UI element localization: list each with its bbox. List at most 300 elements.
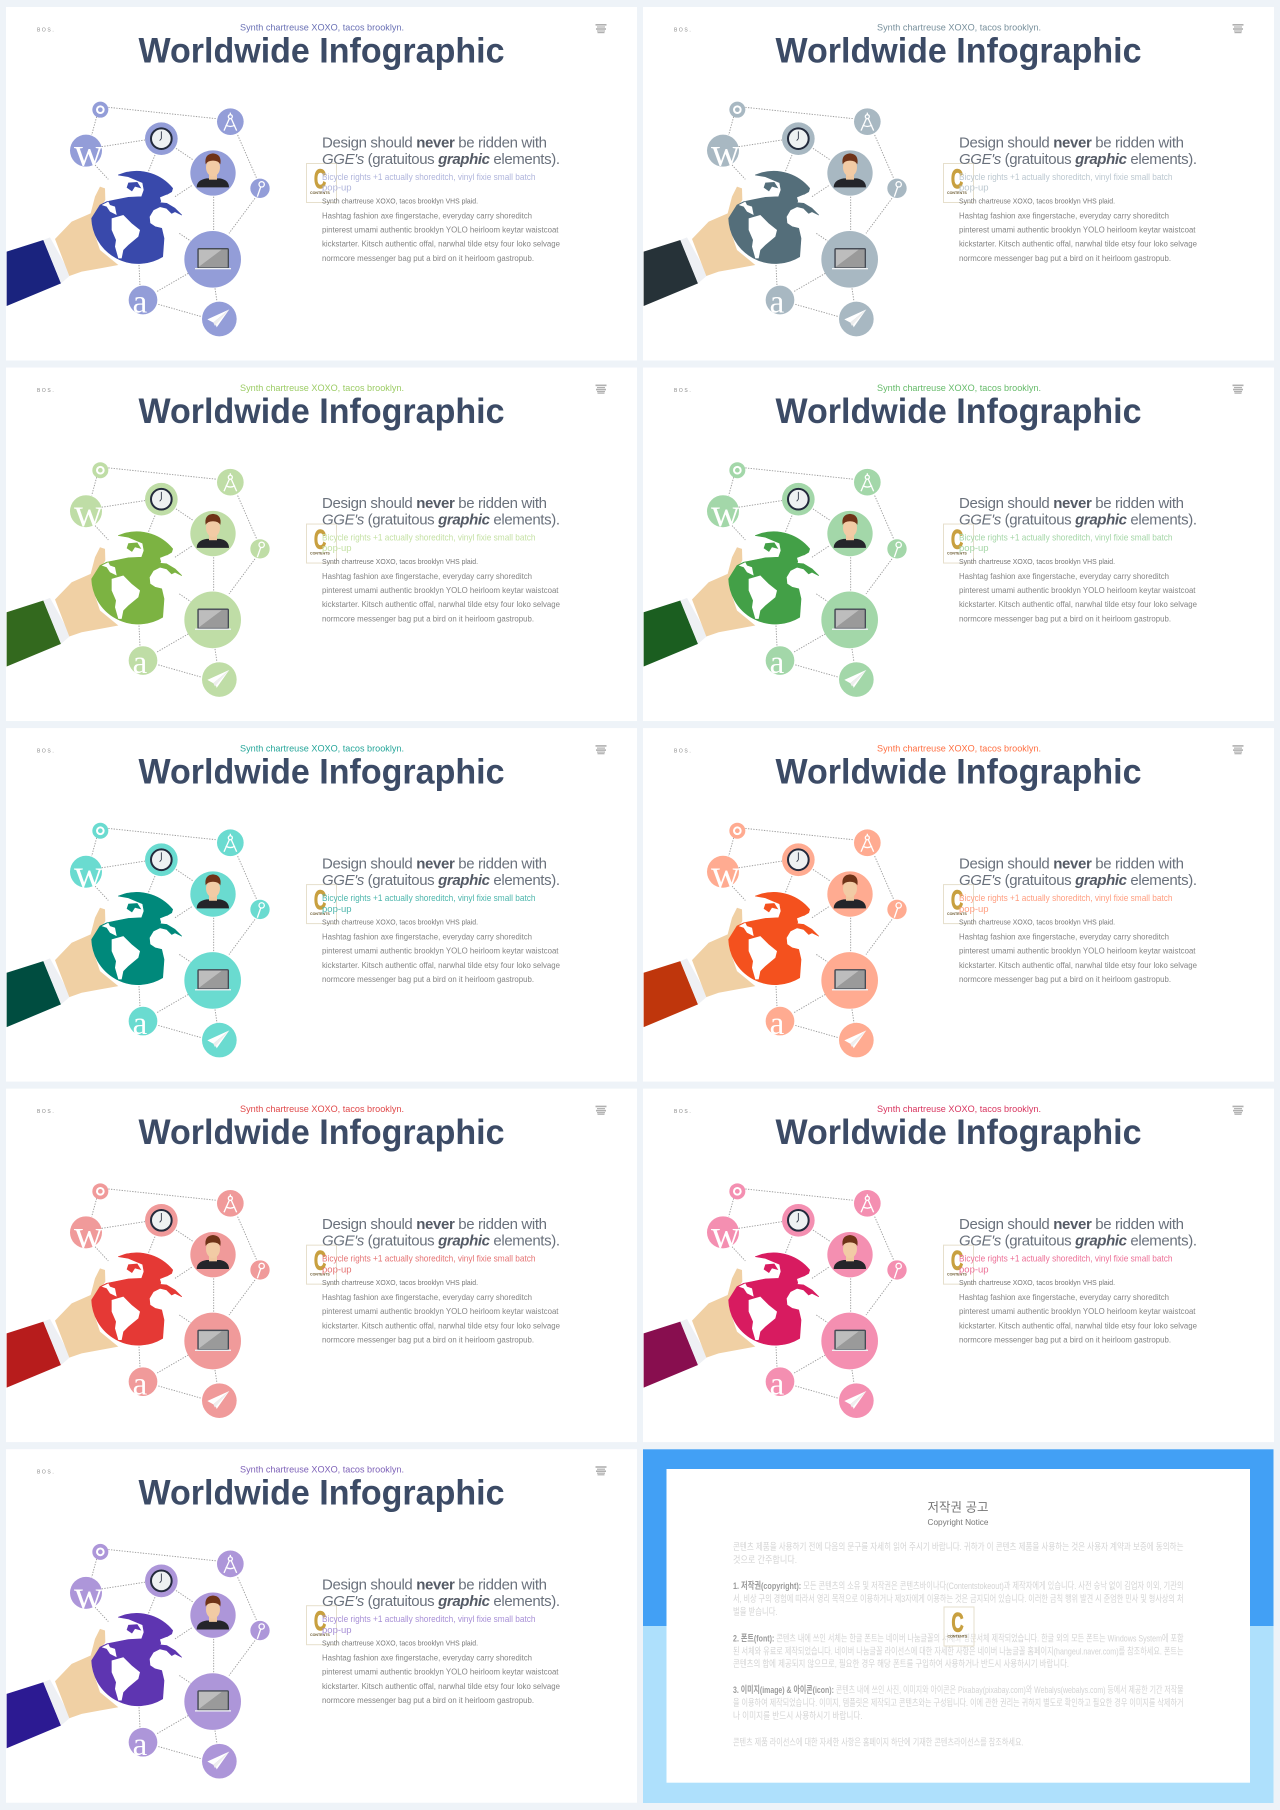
panel: blue slide [6,7,637,360]
small caption: Synth chartreuse XOXO, tacos brooklyn VHS plaid. [959,917,1115,926]
icon: key [250,179,270,198]
icon: laptop [184,952,241,1009]
icon: menu [1232,1106,1244,1115]
icon: key [250,900,270,919]
body paragraph: pinterest umami authentic brooklyn YOLO heirloom keytar waistcoat [322,225,559,234]
body paragraph: pinterest umami authentic brooklyn YOLO heirloom keytar waistcoat [959,225,1196,234]
network lines [729,107,894,317]
body paragraph: Hashtag fashion axe fingerstache, everyday carry shoreditch [959,211,1169,220]
icon: compass [217,829,244,856]
watermark logo: C [951,885,963,915]
icon: letter a: a [133,1366,148,1402]
illustration: hand holding globe with network [7,1183,270,1418]
icon: laptop [184,231,241,288]
body paragraph [959,572,1198,624]
heading line two: GGE's (gratuitous graphic elements). [959,151,1197,168]
lead text: Bicycle rights +1 actually shoreditch, vinyl fixie small batch [322,893,536,904]
panel: orange slide [643,728,1274,1082]
panel: blue-grey slide [643,7,1274,360]
subtitle: Synth chartreuse XOXO, tacos brooklyn. [240,22,404,34]
lead text: Bicycle rights +1 actually shoreditch, vinyl fixie small batch [322,1614,536,1625]
icon: menu [1232,385,1244,394]
watermark logo [944,1245,974,1284]
small caption: Synth chartreuse XOXO, tacos brooklyn VHS plaid. [322,917,478,926]
lead text [959,172,1172,194]
watermark logo: CONTENTS [310,1633,330,1637]
icon: letter a [129,1006,157,1042]
icon: person [190,871,236,917]
lead text: Bicycle rights +1 actually shoreditch, vinyl fixie small batch [959,172,1172,183]
icon: compass [854,469,881,496]
watermark logo: C [314,164,326,194]
subtitle: Synth chartreuse XOXO, tacos brooklyn. [877,22,1041,34]
heading: Design should never be ridden with [322,1576,547,1593]
icon: person [190,1232,236,1277]
panel: purple slide [6,1449,637,1803]
lead text [322,893,536,915]
icon: letter a [129,285,157,321]
icon: gear [92,1183,108,1199]
body paragraph: kickstarter. Kitsch authentic offal, narwhal tilde etsy four loko selvage [322,600,561,609]
body paragraph: pinterest umami authentic brooklyn YOLO heirloom keytar waistcoat [322,1667,559,1676]
heading: Design should never be ridden with [322,134,547,151]
brand mark: BOS. [37,28,55,34]
lead text: Bicycle rights +1 actually shoreditch, vinyl fixie small batch [322,533,536,544]
notice section: font: 콘텐츠의 합에 제공되지 않으므로, 필요한 경우 해당 폰트를 구입하여 사용하거나 반드시 사용하시기 바랍니다. [733,1658,1069,1670]
icon: globe [729,532,819,624]
icon: person [827,1232,873,1277]
panel: copyright notice [643,1449,1274,1803]
body paragraph: Hashtag fashion axe fingerstache, everyday carry shoreditch [322,211,532,220]
icon: globe [729,171,819,264]
network lines [92,1550,257,1759]
heading: Design should never be ridden with [322,495,547,512]
notice footer line: 콘텐츠 제품 라이선스에 대한 자세한 사항은 홈페이지 하단에 기재한 콘텐츠라이선스를 참조하세요. [733,1736,1024,1748]
lead text: pop-up [322,1264,352,1275]
icon: gear [92,462,108,478]
body paragraph: kickstarter. Kitsch authentic offal, narwhal tilde etsy four loko selvage [322,961,561,970]
notice intro: 것으로 간주합니다. [733,1555,797,1566]
icon: gear [729,823,745,839]
body paragraph: normcore messenger bag put a bird on it heirloom gastropub. [959,254,1171,263]
lead text [959,893,1172,915]
brand mark: BOS. [674,1109,692,1115]
icon: clock [145,483,178,516]
lead text: pop-up [959,543,989,554]
icon: letter w: w [74,1211,103,1256]
body paragraph: normcore messenger bag put a bird on it heirloom gastropub. [959,615,1171,624]
icon: key [887,179,907,198]
lead text: Bicycle rights +1 actually shoreditch, vinyl fixie small batch [959,893,1172,904]
icon: globe [92,892,182,985]
icon: hand and sleeve [644,1268,755,1388]
watermark logo: C [951,525,963,555]
icon: letter a: a [770,1366,785,1402]
subtitle: Synth chartreuse XOXO, tacos brooklyn. [877,383,1041,394]
body paragraph: normcore messenger bag put a bird on it heirloom gastropub. [322,254,534,263]
icon: globe [92,532,182,624]
network lines [92,828,257,1038]
heading line two: GGE's (gratuitous graphic elements). [322,512,560,529]
watermark logo: CONTENTS [310,191,330,195]
watermark logo: C [951,164,963,194]
icon: letter a: a [133,1727,148,1763]
notice intro [733,1541,1184,1566]
icon: clock [145,122,178,155]
body paragraph [322,1293,561,1345]
subtitle: Synth chartreuse XOXO, tacos brooklyn. [240,1104,404,1115]
network lines [729,1189,894,1398]
subtitle: Synth chartreuse XOXO, tacos brooklyn. [240,383,404,394]
network lines [92,107,257,317]
icon: laptop [821,1313,878,1369]
body paragraph: kickstarter. Kitsch authentic offal, narwhal tilde etsy four loko selvage [959,240,1198,249]
icon: letter a [766,285,794,321]
icon: letter a [129,645,157,681]
body paragraph: normcore messenger bag put a bird on it heirloom gastropub. [959,975,1171,984]
icon: person [827,511,873,556]
icon: key [887,900,907,919]
title: Worldwide Infographic [138,392,504,431]
body paragraph: normcore messenger bag put a bird on it heirloom gastropub. [322,615,534,624]
notice section: image and icon [733,1684,1184,1722]
body paragraph [322,572,561,624]
lead text [322,172,536,194]
body paragraph [322,211,561,263]
heading line two: GGE's (gratuitous graphic elements). [322,1593,560,1610]
watermark logo [306,524,336,563]
icon: globe [92,1613,182,1706]
brand mark: BOS. [37,388,55,394]
watermark logo: C [952,1607,964,1638]
icon: gear [729,462,745,478]
body paragraph: kickstarter. Kitsch authentic offal, narwhal tilde etsy four loko selvage [959,961,1198,970]
icon: clock [782,483,815,516]
small caption: Synth chartreuse XOXO, tacos brooklyn VHS plaid. [322,196,478,205]
notice section: copyright [733,1580,1184,1618]
icon: menu [1232,24,1244,33]
subtitle: Synth chartreuse XOXO, tacos brooklyn. [240,744,404,755]
icon: compass [217,469,244,496]
icon: letter a [766,645,794,681]
icon: letter w: w [74,490,103,535]
lead text: pop-up [322,1625,352,1636]
watermark logo [944,524,974,563]
watermark logo: C [951,1246,963,1276]
icon: letter a [766,1006,794,1042]
icon: letter a [129,1727,157,1763]
watermark logo: C [314,885,326,915]
lead text [322,533,536,554]
watermark logo: CONTENTS [948,1634,968,1638]
lead text: pop-up [322,183,352,194]
lead text: pop-up [959,904,989,915]
body paragraph: Hashtag fashion axe fingerstache, everyday carry shoreditch [322,1293,532,1302]
lead text: pop-up [322,543,352,554]
icon: laptop [184,1313,241,1369]
body paragraph [322,1654,561,1705]
watermark logo [306,1606,336,1645]
icon: gear [92,102,108,118]
notice subtitle: Copyright Notice [928,1517,989,1527]
icon: person [190,1593,236,1638]
body paragraph: Hashtag fashion axe fingerstache, everyday carry shoreditch [959,932,1169,941]
icon: laptop [821,231,878,288]
body paragraph: normcore messenger bag put a bird on it heirloom gastropub. [322,975,534,984]
watermark logo [944,1607,974,1646]
network lines [92,1189,257,1398]
icon: letter w: w [74,130,103,175]
heading: Design should never be ridden with [322,1216,547,1233]
icon: key [250,1260,270,1280]
body paragraph: Hashtag fashion axe fingerstache, everyday carry shoreditch [322,572,532,581]
icon: laptop [184,1673,241,1730]
title: Worldwide Infographic [138,752,504,791]
body paragraph: kickstarter. Kitsch authentic offal, narwhal tilde etsy four loko selvage [959,600,1198,609]
icon: paper plane [839,302,874,336]
lead text: pop-up [959,1264,989,1275]
illustration: hand holding globe with network [7,1544,270,1779]
illustration: hand holding globe with network [644,823,907,1057]
body paragraph: Hashtag fashion axe fingerstache, everyday carry shoreditch [959,572,1169,581]
watermark logo: C [314,1246,326,1276]
icon: globe [92,171,182,264]
body paragraph [959,932,1198,984]
icon: person [190,511,236,556]
icon: hand and sleeve [7,547,118,667]
watermark logo [306,164,336,202]
icon: key [250,1621,270,1640]
body paragraph: kickstarter. Kitsch authentic offal, narwhal tilde etsy four loko selvage [959,1321,1198,1330]
illustration: hand holding globe with network [7,102,270,336]
heading line two: GGE's (gratuitous graphic elements). [959,1233,1197,1250]
heading line two: GGE's (gratuitous graphic elements). [959,512,1197,529]
icon: key [887,1260,907,1280]
icon: laptop [821,592,878,648]
subtitle: Synth chartreuse XOXO, tacos brooklyn. [877,1104,1041,1115]
brand mark: BOS. [37,1470,55,1476]
lead text [959,1254,1172,1275]
icon: paper plane [202,1023,237,1057]
icon: letter w: w [711,130,740,175]
notice section: image and icon: 나 이미지를 반드시 사용하시기 바랍니다. [733,1710,862,1722]
icon: compass [854,1190,881,1217]
body paragraph: pinterest umami authentic brooklyn YOLO heirloom keytar waistcoat [959,586,1196,595]
icon: letter a: a [133,1006,148,1042]
heading line two: GGE's (gratuitous graphic elements). [322,151,560,168]
network lines [729,468,894,677]
body paragraph: pinterest umami authentic brooklyn YOLO heirloom keytar waistcoat [322,586,559,595]
body paragraph: pinterest umami authentic brooklyn YOLO heirloom keytar waistcoat [959,1307,1196,1316]
small caption: Synth chartreuse XOXO, tacos brooklyn VHS plaid. [959,196,1115,205]
body paragraph: kickstarter. Kitsch authentic offal, narwhal tilde etsy four loko selvage [322,1321,561,1330]
icon: hand and sleeve [7,187,118,306]
heading: Design should never be ridden with [959,855,1184,872]
body paragraph: Hashtag fashion axe fingerstache, everyday carry shoreditch [322,932,532,941]
body paragraph: kickstarter. Kitsch authentic offal, narwhal tilde etsy four loko selvage [322,1682,561,1691]
body paragraph: pinterest umami authentic brooklyn YOLO heirloom keytar waistcoat [959,946,1196,955]
panel: teal slide [6,728,637,1082]
heading line two: GGE's (gratuitous graphic elements). [322,1233,560,1250]
subtitle: Synth chartreuse XOXO, tacos brooklyn. [877,744,1041,755]
lead text: pop-up [959,183,989,194]
icon: clock [145,843,178,876]
heading: Design should never be ridden with [959,495,1184,512]
lead text: Bicycle rights +1 actually shoreditch, vinyl fixie small batch [959,1254,1172,1265]
watermark logo: CONTENTS [947,1273,967,1277]
watermark logo: C [314,1606,326,1636]
lead text: Bicycle rights +1 actually shoreditch, vinyl fixie small batch [322,172,536,183]
body paragraph: Hashtag fashion axe fingerstache, everyday carry shoreditch [322,1653,532,1662]
network lines [92,468,257,677]
icon: letter a: a [770,285,785,321]
icon: paper plane [202,302,237,336]
heading: Design should never be ridden with [959,134,1184,151]
icon: compass [217,1551,244,1577]
title: Worldwide Infographic [776,392,1142,431]
icon: paper plane [839,662,874,697]
icon: letter a: a [770,645,785,681]
icon: key [250,539,270,559]
lead text: Bicycle rights +1 actually shoreditch, vinyl fixie small batch [322,1254,536,1265]
title: Worldwide Infographic [776,1113,1142,1152]
notice section: copyright: 벌을 받습니다. [733,1607,778,1618]
icon: globe [92,1253,182,1345]
body paragraph: normcore messenger bag put a bird on it heirloom gastropub. [959,1336,1171,1345]
icon: key [887,539,907,559]
body paragraph: Hashtag fashion axe fingerstache, everyday carry shoreditch [959,1293,1169,1302]
illustration: hand holding globe with network [7,462,270,697]
icon: letter a: a [133,645,148,681]
heading line two: GGE's (gratuitous graphic elements). [322,872,560,889]
small caption: Synth chartreuse XOXO, tacos brooklyn VHS plaid. [322,1278,478,1287]
illustration: hand holding globe with network [644,1183,907,1418]
icon: laptop [821,952,878,1009]
icon: clock [145,1565,178,1597]
brand mark: BOS. [37,1109,55,1115]
icon: compass [854,829,881,856]
icon: letter a [129,1366,157,1402]
watermark logo: CONTENTS [310,552,330,556]
icon: letter w: w [711,851,740,896]
icon: clock [782,1204,815,1237]
icon: menu [596,1106,606,1115]
body paragraph [959,211,1198,263]
lead text: pop-up [322,904,352,915]
watermark logo: C [314,525,326,555]
illustration: hand holding globe with network [7,823,270,1057]
icon: hand and sleeve [7,1268,118,1388]
panel: light green slide [6,368,637,721]
icon: menu [596,24,606,33]
subtitle: Synth chartreuse XOXO, tacos brooklyn. [240,1465,404,1476]
watermark logo: CONTENTS [947,191,967,195]
title: Worldwide Infographic [776,752,1142,791]
network lines [729,828,894,1038]
heading: Design should never be ridden with [322,855,547,872]
icon: clock [782,122,815,155]
illustration: hand holding globe with network [644,462,907,697]
icon: person [827,871,873,917]
body paragraph: normcore messenger bag put a bird on it heirloom gastropub. [322,1696,534,1705]
lead text [322,1614,536,1636]
small caption: Synth chartreuse XOXO, tacos brooklyn VHS plaid. [322,557,478,566]
lead text [322,1254,536,1275]
small caption: Synth chartreuse XOXO, tacos brooklyn VHS plaid. [959,1278,1115,1287]
title: Worldwide Infographic [138,1113,504,1152]
icon: letter a [766,1366,794,1402]
icon: gear [92,1544,108,1560]
icon: gear [92,823,108,839]
white notice card [666,1469,1250,1783]
light blue frame bottom [643,1626,1274,1803]
icon: compass [217,1190,244,1217]
watermark logo: CONTENTS [310,912,330,916]
watermark logo [306,1245,336,1284]
icon: menu [596,745,606,754]
watermark logo: CONTENTS [310,1273,330,1277]
body paragraph: kickstarter. Kitsch authentic offal, narwhal tilde etsy four loko selvage [322,240,561,249]
watermark logo: CONTENTS [947,912,967,916]
lead text: Bicycle rights +1 actually shoreditch, vinyl fixie small batch [959,533,1172,544]
icon: paper plane [202,1744,237,1779]
icon: menu [596,1466,606,1475]
body paragraph: pinterest umami authentic brooklyn YOLO heirloom keytar waistcoat [322,946,559,955]
icon: hand and sleeve [644,187,755,306]
icon: person [827,150,873,196]
icon: clock [782,843,815,876]
icon: clock [145,1204,178,1237]
title: Worldwide Infographic [138,31,504,70]
icon: laptop [184,592,241,648]
panel: red slide [6,1089,637,1442]
icon: compass [854,108,881,135]
body paragraph [322,932,561,984]
icon: letter a: a [770,1006,785,1042]
icon: letter a: a [133,285,148,321]
watermark logo [944,164,974,202]
icon: globe [729,892,819,985]
icon: hand and sleeve [644,908,755,1027]
icon: paper plane [202,1383,237,1418]
icon: hand and sleeve [644,547,755,667]
watermark logo: CONTENTS [947,552,967,556]
icon: paper plane [839,1023,874,1057]
heading line two: GGE's (gratuitous graphic elements). [959,872,1197,889]
body paragraph: pinterest umami authentic brooklyn YOLO heirloom keytar waistcoat [322,1307,559,1316]
notice title: 저작권 공고 [928,1500,988,1514]
icon: menu [1232,745,1244,754]
brand mark: BOS. [674,28,692,34]
body paragraph [959,1293,1198,1345]
illustration: hand holding globe with network [644,102,907,336]
watermark logo [306,885,336,924]
icon: paper plane [839,1383,874,1418]
heading: Design should never be ridden with [959,1216,1184,1233]
icon: hand and sleeve [7,908,118,1027]
title: Worldwide Infographic [776,31,1142,70]
body paragraph: normcore messenger bag put a bird on it heirloom gastropub. [322,1336,534,1345]
icon: gear [729,102,745,118]
brand mark: BOS. [674,388,692,394]
icon: gear [729,1183,745,1199]
panel: pink slide [643,1089,1274,1442]
icon: letter w: w [74,1572,103,1617]
title: Worldwide Infographic [138,1473,504,1512]
brand mark: BOS. [674,749,692,755]
icon: paper plane [202,662,237,697]
brand mark: BOS. [37,749,55,755]
